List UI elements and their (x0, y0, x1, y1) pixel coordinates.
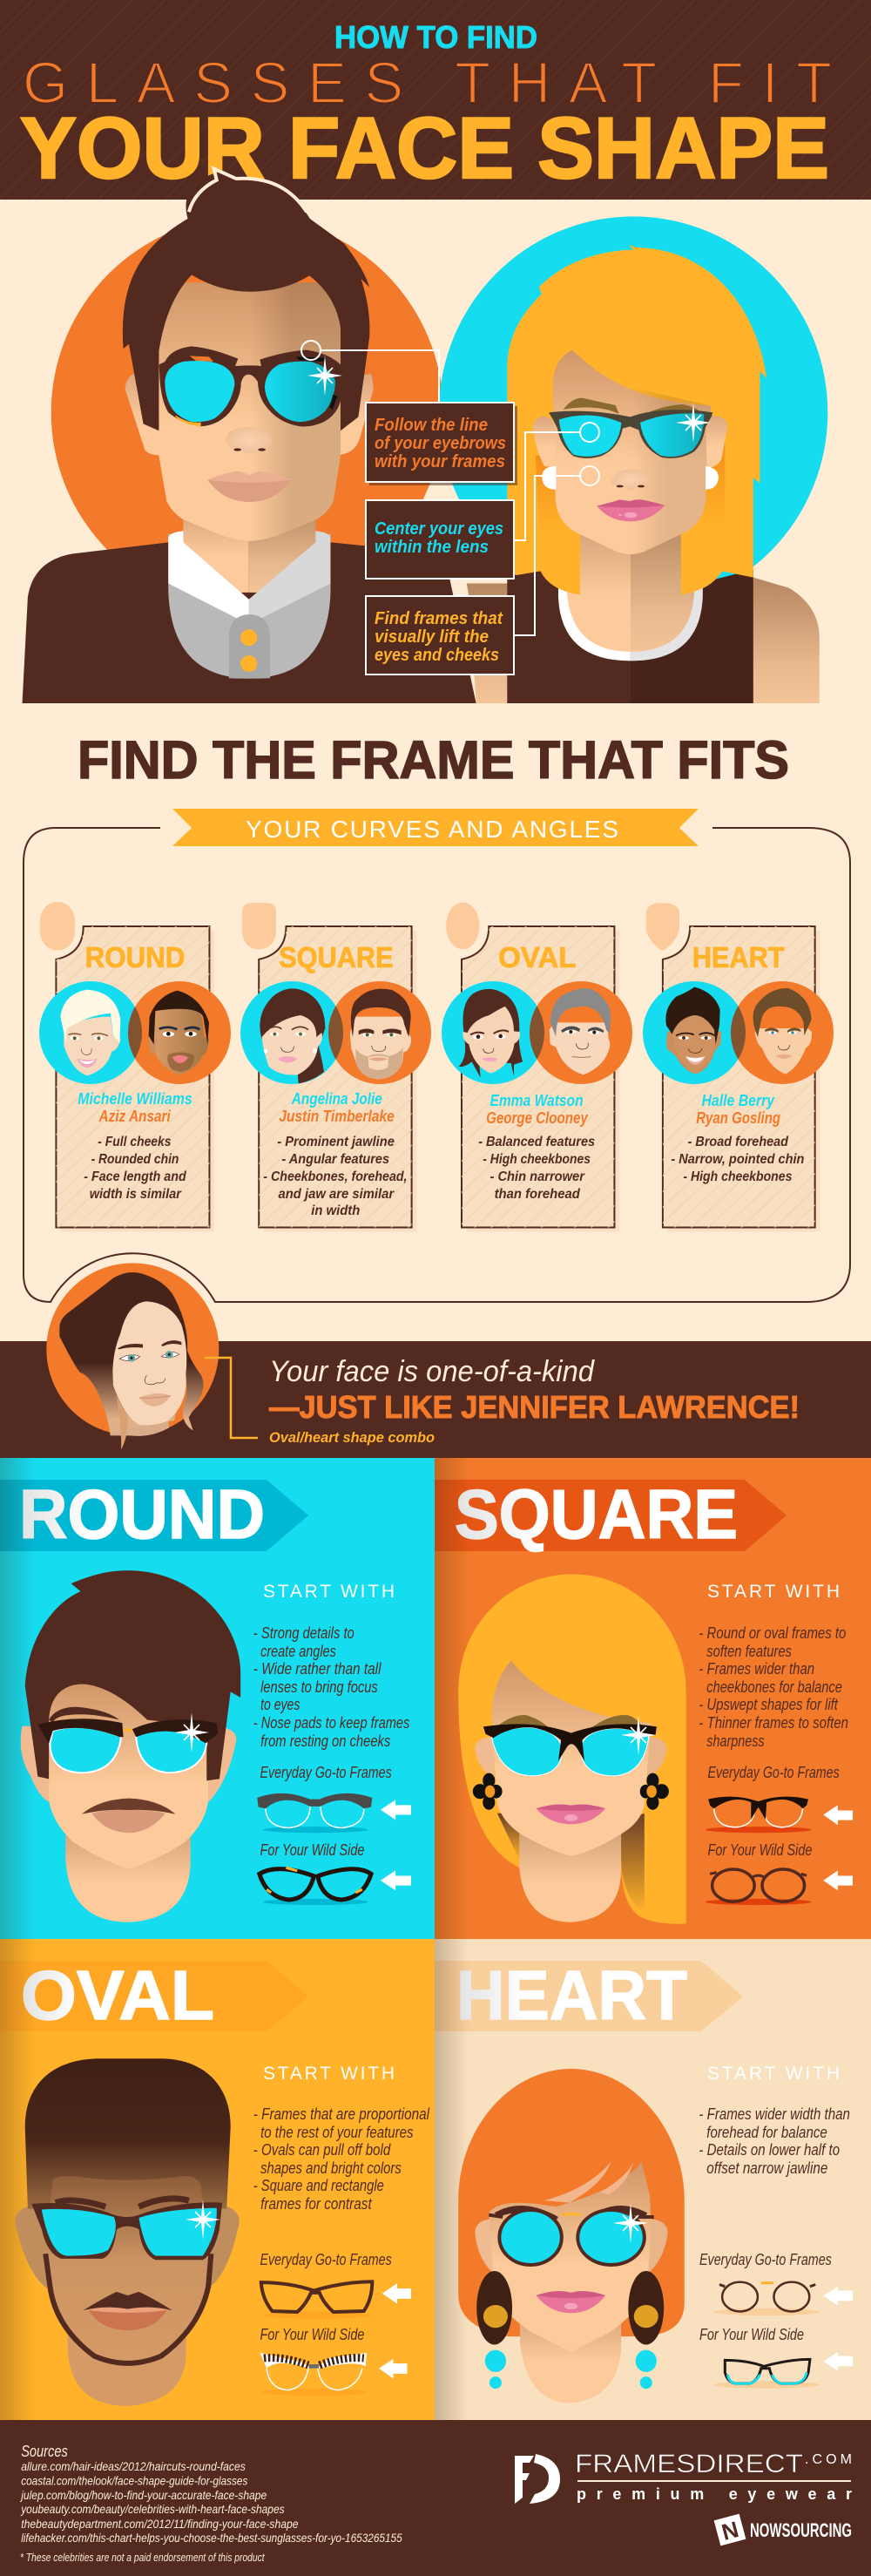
text: square start with: - Round or oval frames to (699, 1624, 846, 1642)
logo: framesdirect: .COM (805, 2452, 852, 2467)
header banner: YOUR FACE SHAPE (20, 99, 829, 196)
banner: heart (435, 1961, 743, 2031)
text: oval start with: - Frames that are proportional (253, 2105, 430, 2123)
celebrity names and features: George Clooney (486, 1109, 589, 1127)
text: square start with: soften features (706, 1643, 792, 1660)
callout: center your eyes: Center your eyes (375, 519, 503, 539)
callout: find frames: Find frames that (375, 609, 503, 628)
text: round start with (253, 1582, 409, 1859)
celebrity names and features: Angelina Jolie (291, 1090, 382, 1108)
text: heart start with: - Details on lower half to (699, 2141, 840, 2159)
card titles: ROUND (85, 941, 185, 973)
text: oval start with: For Your Wild Side (260, 2326, 364, 2343)
illustration: square woman (458, 1574, 853, 1924)
text: heart start with: offset narrow jawline (706, 2159, 827, 2177)
icon: sparkle (186, 2200, 220, 2240)
text: square start with: Everyday Go-to Frames (707, 1764, 840, 1781)
sources list (19, 2443, 402, 2564)
celebrity names and features (78, 1090, 805, 1218)
text: square start with: - Upswept shapes for lift (699, 1696, 839, 1713)
icon: sparkle (174, 1712, 209, 1752)
text: heart start with: START WITH (707, 2064, 840, 2084)
celebrity names and features: Emma Watson (490, 1092, 584, 1109)
band: jennifer lawrence (0, 1341, 871, 1458)
rounded frame outline (24, 828, 850, 1302)
text: round start with: START WITH (263, 1582, 395, 1602)
text: heart start with: For Your Wild Side (699, 2326, 804, 2343)
celebrity circles (39, 981, 834, 1084)
text: heart start with: Everyday Go-to Frames (699, 2251, 832, 2268)
celebrity names and features: Aziz Ansari (98, 1108, 172, 1125)
text: oval start with: to the rest of your features (260, 2124, 413, 2141)
text: oval start with: frames for contrast (260, 2195, 373, 2213)
logo: framesdirect (515, 2450, 852, 2504)
celebrity names and features: than forehead (495, 1187, 581, 1202)
text: round start with: Everyday Go-to Frames (260, 1764, 392, 1781)
text: your face is one of a kind: Oval/heart shape combo (269, 1429, 435, 1446)
celebrity names and features: - High cheekbones (683, 1169, 792, 1184)
text: round start with: to eyes (260, 1696, 300, 1713)
ribbon: your curves and angles (172, 809, 699, 846)
celebrity names and features: - High cheekbones (483, 1152, 591, 1167)
text: your face is one of a kind (269, 1355, 800, 1446)
callout: follow the line: Follow the line (375, 416, 488, 435)
icon: woman lens sparkle (676, 403, 711, 443)
text: round start with: - Strong details to (253, 1624, 354, 1642)
card titles: SQUARE (279, 941, 394, 973)
sources list: coastal.com/thelook/face-shape-guide-for-glasses (21, 2473, 247, 2487)
callout: follow the line (366, 403, 517, 485)
text: round start with: lenses to bring focus (260, 1678, 378, 1696)
header banner (0, 0, 871, 200)
icon: sparkle (613, 2203, 648, 2243)
sources list: allure.com/hair-ideas/2012/haircuts-round-faces (21, 2459, 246, 2473)
text: round start with: For Your Wild Side (260, 1841, 364, 1859)
illustration: round man (21, 1570, 411, 1922)
celebrity faces: round and square (60, 988, 411, 1083)
sources list: * These celebrities are not a paid endorsement of this product (20, 2551, 266, 2564)
celebrity names and features: - Full cheeks (98, 1135, 172, 1149)
panel: square (435, 1458, 871, 1939)
logo: framesdirect: FRAMESDIRECT (575, 2450, 803, 2478)
logo: framesdirect: premium eyewear (577, 2485, 852, 2503)
logo: nowsourcing (714, 2514, 852, 2545)
callout: follow the line: of your eyebrows (375, 434, 506, 453)
callout: center your eyes: within the lens (375, 538, 489, 557)
text: oval start with: shapes and bright colors (260, 2159, 402, 2177)
text: square start with: START WITH (707, 1582, 840, 1602)
sources list: lifehacker.com/this-chart-helps-you-choose-the-best-sunglasses-for-yo-1653265155 (21, 2531, 402, 2545)
panel: round (0, 1458, 435, 1939)
text: oval start with (253, 2064, 430, 2343)
text: square start with: For Your Wild Side (707, 1841, 812, 1859)
cards and face shape icons (40, 902, 820, 1231)
celebrity names and features: and jaw are similar (279, 1187, 395, 1202)
heading: find the frame: FIND THE FRAME THAT FITS (78, 730, 789, 790)
callout: follow the line: with your frames (375, 452, 505, 471)
heading: heart: HEART (456, 1956, 687, 2034)
celebrity names and features: Michelle Williams (78, 1090, 192, 1108)
text: your face is one of a kind: Your face is one-of-a-kind (269, 1355, 595, 1388)
text: square start with: - Frames wider than (699, 1660, 814, 1678)
text: round start with: - Wide rather than tall (253, 1660, 381, 1678)
text: square start with (699, 1582, 848, 1859)
logo: nowsourcing: N (719, 2516, 741, 2545)
illustration: oval man (15, 2058, 411, 2406)
text: oval start with: - Ovals can pull off bold (253, 2141, 391, 2159)
text: heart start with: forehead for balance (706, 2124, 827, 2141)
callout: find frames (366, 596, 514, 675)
heading: square: SQUARE (455, 1475, 738, 1553)
celebrity names and features: - Prominent jawline (277, 1135, 395, 1149)
banner: round (0, 1480, 308, 1551)
man face details: glasses, nose, lips (159, 346, 341, 502)
connector lines (301, 341, 599, 635)
text: oval start with: START WITH (263, 2064, 395, 2084)
panel: heart (435, 1939, 871, 2420)
text: square start with: cheekbones for balance (706, 1678, 842, 1696)
banner: square (435, 1480, 787, 1551)
celebrity names and features: Justin Timberlake (279, 1108, 395, 1125)
banner: oval (0, 1961, 308, 2031)
celebrity names and features: - Chin narrower (490, 1169, 585, 1184)
connector: lawrence (205, 1358, 258, 1438)
celebrity names and features: - Angular features (281, 1152, 389, 1167)
woman face details: ears, earrings, glasses, nose, lips (533, 398, 727, 521)
sources list: Sources (21, 2443, 68, 2460)
sources list: julep.com/blog/how-to-find-your-accurate-face-shape (19, 2488, 267, 2502)
hero illustration: two faces (23, 169, 827, 703)
card titles (85, 941, 785, 973)
card titles: HEART (692, 941, 785, 973)
callout: center your eyes (366, 500, 514, 579)
icon: man lens sparkle (307, 356, 342, 396)
celebrity names and features: - Face length and (84, 1169, 187, 1184)
sources list: thebeautydepartment.com/2012/11/finding-your-face-shape (21, 2517, 299, 2531)
footer (0, 2420, 871, 2576)
text: oval start with: Everyday Go-to Frames (260, 2251, 392, 2268)
celebrity names and features: Ryan Gosling (696, 1109, 780, 1127)
celebrity names and features: in width (311, 1203, 361, 1218)
illustration: heart woman (458, 2069, 853, 2403)
text: your face is one of a kind: —JUST LIKE JENNIFER LAWRENCE! (269, 1389, 800, 1425)
panel: oval (0, 1939, 435, 2420)
text: round start with: from resting on cheeks (260, 1732, 390, 1750)
text: oval start with: - Square and rectangle (253, 2177, 384, 2194)
heading: round: ROUND (19, 1475, 265, 1553)
celebrity names and features: - Broad forehead (688, 1135, 789, 1149)
celebrity names and features: width is similar (90, 1187, 182, 1202)
card titles: OVAL (498, 941, 576, 973)
header banner: GLASSES THAT FIT (23, 51, 832, 116)
celebrity names and features: - Narrow, pointed chin (671, 1152, 805, 1167)
icon: sparkle (621, 1715, 656, 1755)
ribbon: your curves and angles: YOUR CURVES AND ANGLES (246, 816, 618, 843)
celebrity names and features: - Balanced features (478, 1135, 595, 1149)
celebrity names and features: - Rounded chin (91, 1152, 179, 1167)
heading: oval: OVAL (21, 1956, 214, 2034)
celebrity faces: oval and heart (459, 987, 812, 1078)
portrait: jennifer lawrence (46, 1263, 219, 1449)
callout: find frames: visually lift the (375, 627, 489, 647)
text: square start with: sharpness (706, 1732, 765, 1750)
callout: find frames: eyes and cheeks (375, 646, 499, 665)
celebrity names and features: - Cheekbones, forehead, (263, 1169, 408, 1184)
text: round start with: create angles (260, 1643, 336, 1660)
text: round start with: - Nose pads to keep frames (253, 1714, 409, 1732)
header banner: HOW TO FIND (334, 19, 537, 55)
sources list: youbeauty.com/beauty/celebrities-with-heart-face-shapes (20, 2502, 285, 2516)
text: heart start with (699, 2064, 850, 2343)
celebrity names and features: Halle Berry (702, 1092, 775, 1109)
